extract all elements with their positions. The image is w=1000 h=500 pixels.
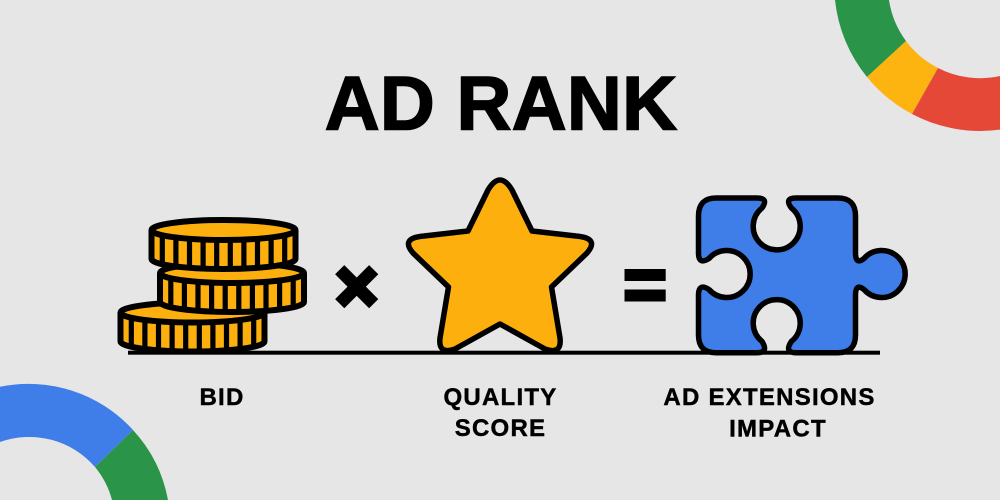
icon: equals sign <box>624 269 666 302</box>
decorative ring: top right <box>835 0 1000 131</box>
baseline <box>128 351 880 355</box>
label: ad extensions impact: IMPACT <box>729 416 827 442</box>
decorative ring: bottom left <box>0 384 168 500</box>
icon: multiply sign <box>340 270 374 304</box>
label: bid: BID <box>199 384 245 411</box>
icon: puzzle piece <box>698 198 905 353</box>
label: quality score: QUALITY <box>443 384 558 411</box>
icon: star <box>408 180 592 351</box>
icon: stack of coins <box>120 220 304 358</box>
label: ad extensions impact: AD EXTENSIONS <box>663 384 876 411</box>
label: quality score: SCORE <box>455 415 546 442</box>
title: AD RANK <box>325 61 677 146</box>
